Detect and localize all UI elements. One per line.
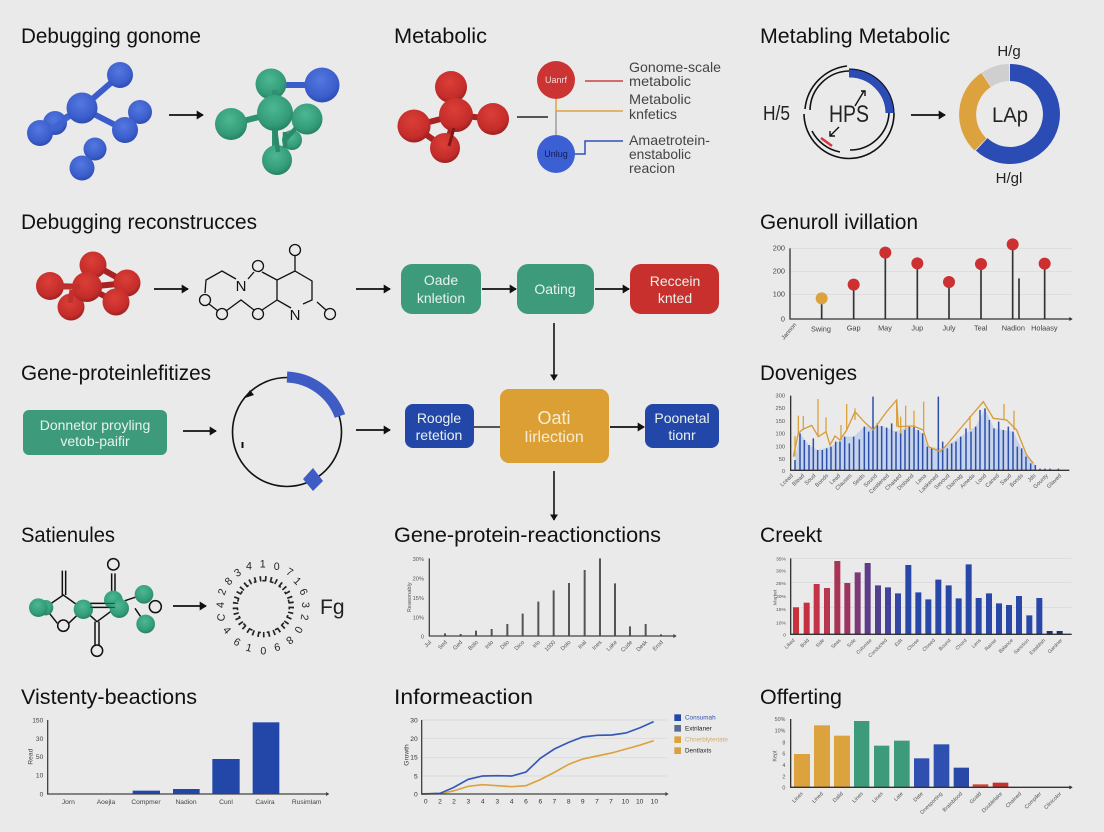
axis labels: Brainblood <box>942 791 964 813</box>
arrow <box>169 114 203 116</box>
node diagram <box>537 59 721 176</box>
axis labels: Ameda <box>959 473 977 490</box>
legend: Chnerblyteriate <box>685 737 728 744</box>
dial numerals: 8 <box>223 575 235 588</box>
label: HPS: HPS <box>829 101 869 128</box>
axis labels: 2 <box>438 798 442 805</box>
dial numerals: 0 <box>274 561 280 573</box>
axis labels: Laskened <box>918 473 940 495</box>
axis labels: Seas <box>830 637 843 650</box>
axis labels: 0 <box>414 791 418 798</box>
axis labels: Gap <box>847 324 861 333</box>
legend text: Metabolic <box>629 91 691 107</box>
axis labels: Soud <box>804 473 817 487</box>
axis labels: 100 <box>773 290 785 299</box>
axis labels: Growth <box>403 744 410 766</box>
axis labels: 5 <box>414 773 418 780</box>
axis labels: 15 <box>410 755 418 762</box>
axis labels: Clauses <box>835 473 854 492</box>
dial numerals: 0 <box>260 646 266 658</box>
dial numerals: 1 <box>291 575 303 588</box>
axis labels: 8 <box>782 740 785 746</box>
axis labels: Lines <box>791 791 805 804</box>
label: H/gl bottom: H/gl <box>996 170 1022 187</box>
box: Oade knletion: knletion <box>417 290 465 306</box>
axis labels: Bound <box>938 638 953 652</box>
axis labels: Dilo <box>500 640 511 651</box>
axis labels: Inal <box>577 640 588 651</box>
axis labels: May <box>878 324 892 333</box>
axis labels <box>407 557 665 654</box>
axis labels: Teal <box>974 324 988 333</box>
axis labels <box>773 244 1058 341</box>
arrow <box>482 288 516 290</box>
axis labels: Blead <box>792 473 806 488</box>
axis labels: 200 <box>773 267 785 276</box>
atom label: N left: N <box>236 278 246 295</box>
axis labels: 300 <box>776 394 785 400</box>
axis labels: Chaised <box>884 473 903 492</box>
axis labels: 7 <box>609 798 613 805</box>
legend text: Gonome-scale <box>629 59 721 75</box>
dial numerals: 6 <box>296 587 310 597</box>
axis labels: Bonds <box>1009 473 1025 489</box>
axis labels: 150 <box>32 717 44 724</box>
axis labels: Jup <box>911 324 923 333</box>
axis labels: Lena <box>915 473 929 486</box>
axis labels: Gounty <box>1033 473 1050 490</box>
title: Metabling Metabolic: Metabling Metabolic <box>760 25 950 48</box>
axis labels: Lined <box>811 791 825 805</box>
axis labels: 20% <box>776 594 787 600</box>
dial numerals: 4 <box>215 602 227 608</box>
title: Creekt: Creekt <box>760 524 822 547</box>
dial numerals: 2 <box>298 613 310 621</box>
node: red <box>537 61 575 99</box>
icon: numbered dial <box>215 558 311 658</box>
axis labels <box>403 717 658 805</box>
icon: red molecule 2 <box>36 252 140 320</box>
box: Oati Iirlection: Oati <box>537 408 571 428</box>
legend text: metabolic <box>629 73 691 89</box>
axis labels: Lake <box>606 640 619 653</box>
legend: Dentlaxts <box>685 748 711 755</box>
box: Reccein knted <box>630 264 719 314</box>
title: Vistenty-beactions: Vistenty-beactions <box>21 686 197 709</box>
label: H/5: H/5 <box>763 103 790 125</box>
axis labels: 50 <box>779 457 785 463</box>
axis labels: Swing <box>811 324 831 333</box>
icon: skeletal structure <box>200 244 336 324</box>
axis labels: 0 <box>783 633 786 639</box>
axis labels: Compmer <box>131 799 161 806</box>
axis labels: Ged <box>452 640 464 652</box>
axis labels: 10% <box>413 615 424 621</box>
axis labels: Cunl <box>219 799 233 806</box>
axis labels: Desk <box>636 640 649 653</box>
axis labels: Doublelake <box>981 791 1004 814</box>
axis labels: Establish <box>1029 638 1047 656</box>
connector line <box>517 116 548 118</box>
axis labels <box>773 556 1064 659</box>
axis labels: Compiler <box>1024 791 1043 810</box>
dial numerals: 1 <box>260 558 266 570</box>
axis labels: 10 <box>622 798 629 805</box>
axis labels: Sed <box>437 640 449 651</box>
arrow <box>610 426 644 428</box>
box: Oating <box>517 264 594 314</box>
axis labels: Read <box>28 748 35 765</box>
axis labels: Jannon <box>781 322 798 341</box>
axis labels: Lcead <box>780 473 795 488</box>
axis labels: 10% <box>775 728 786 734</box>
axis labels: Edit <box>894 637 905 648</box>
axis labels: Liked <box>784 638 797 651</box>
dial numerals: 3 <box>299 602 311 608</box>
axis labels: 30% <box>413 557 424 563</box>
axis labels: 100 <box>776 431 785 437</box>
axis labels: Lines <box>851 791 865 804</box>
spike chart: Gene-protein-reactionctions <box>407 557 677 654</box>
title: Metabolic: Metabolic <box>394 25 487 48</box>
axis labels: Lens <box>971 637 983 650</box>
axis labels: 10% <box>776 620 787 626</box>
label: LAp: LAp <box>992 104 1028 127</box>
title: Offerting: Offerting <box>760 686 842 709</box>
axis labels: Bolo <box>467 640 480 652</box>
legend: Extrilaner <box>685 725 712 732</box>
axis labels: Sole <box>846 638 858 649</box>
lollipop chart: Genuroll ivillation <box>773 238 1073 341</box>
axis labels: 6 <box>782 752 785 758</box>
bar and line chart: Doveniges <box>776 394 1069 495</box>
dial numerals: 6 <box>231 636 242 649</box>
axis labels: 250 <box>776 406 785 412</box>
icon: HPS ring diagram <box>804 66 894 159</box>
axis labels: 30 <box>410 717 418 724</box>
node: blue <box>537 135 575 173</box>
title: Debugging gonome: Debugging gonome <box>21 25 201 48</box>
axis labels: 6 <box>538 798 542 805</box>
legend <box>674 714 728 755</box>
axis labels: July <box>942 324 956 333</box>
axis labels: 150 <box>776 419 785 425</box>
box: Poonetal tionr <box>645 404 719 448</box>
node label: red: Uanrf <box>545 75 567 85</box>
axis labels: Holaasy <box>1031 324 1058 333</box>
axis labels: 15% <box>776 607 787 613</box>
box: Oade knletion <box>401 264 481 314</box>
axis labels: 200 <box>773 244 785 253</box>
axis labels: Chord <box>955 638 969 652</box>
axis labels: 0 <box>782 469 785 475</box>
box: Roogle retetion: retetion <box>416 427 462 443</box>
axis labels: 10 <box>636 798 644 805</box>
axis labels: Erod <box>652 640 665 653</box>
box: Roogle retetion <box>405 404 474 448</box>
atom label: N right: N <box>290 307 300 324</box>
axis labels: 7 <box>552 798 556 805</box>
axis labels <box>28 717 322 806</box>
axis labels: Dolo <box>560 640 572 652</box>
dial numerals: C <box>215 612 228 622</box>
axis labels: Bonds <box>814 473 830 489</box>
bar chart: Creekt <box>773 556 1072 659</box>
title: Debugging reconstrucces: Debugging reconstrucces <box>21 211 257 234</box>
bar chart: Offerting <box>773 717 1073 816</box>
axis labels: Aoejla <box>97 799 116 806</box>
arrow <box>595 288 629 290</box>
arrow <box>356 429 390 431</box>
box: Reccein knted: knted <box>658 290 692 306</box>
axis labels: Seids <box>852 473 867 487</box>
axis labels: Jul <box>424 640 433 649</box>
arrow <box>183 430 216 432</box>
axis labels: 2 <box>452 798 456 805</box>
dial numerals: 8 <box>283 633 295 646</box>
axis labels: Clinicolor <box>1043 791 1063 811</box>
axis labels: 15% <box>413 596 424 602</box>
legend text: reacion <box>629 160 675 176</box>
title: Satienules: Satienules <box>21 524 115 547</box>
axis labels: 3 <box>495 798 499 805</box>
axis labels: 20% <box>413 577 424 583</box>
axis labels: 30 <box>36 736 44 743</box>
box: Oati Iirlection <box>500 389 609 463</box>
title: Doveniges: Doveniges <box>760 362 857 385</box>
axis labels: Onesporting <box>919 791 944 816</box>
dial numerals: 4 <box>220 625 233 637</box>
axis labels: Dalid <box>832 791 845 804</box>
dial numerals: 7 <box>284 566 295 579</box>
axis labels: Cestlened <box>868 473 891 495</box>
icon: green molecule <box>215 68 340 175</box>
axis labels: Lines <box>871 791 885 804</box>
axis labels: Ines <box>592 640 604 652</box>
axis labels: 0 <box>40 791 44 798</box>
axis labels: 2 <box>782 775 785 781</box>
title: Genuroll ivillation: Genuroll ivillation <box>760 211 918 234</box>
axis labels: 50% <box>775 717 786 723</box>
box: Oating: Oating <box>534 281 576 297</box>
axis labels: 50 <box>36 754 44 761</box>
axis labels <box>773 717 1063 816</box>
box: Roogle retetion: Roogle <box>417 410 461 426</box>
legend text <box>629 59 721 176</box>
title: Gene-protein-reactionctions: Gene-protein-reactionctions <box>394 524 661 547</box>
axis labels: Conducted <box>867 638 889 659</box>
arrow <box>911 114 945 116</box>
axis labels: 10 <box>651 798 658 805</box>
arrow down <box>553 323 555 380</box>
connector line <box>474 426 500 428</box>
axis labels: Lond <box>975 473 988 486</box>
node label: blue: Unlug <box>544 149 568 159</box>
axis labels: 0 <box>782 786 785 792</box>
axis labels: Chained <box>1005 791 1023 809</box>
bar chart: Vistenty-beactions <box>28 717 329 806</box>
arrow down <box>553 471 555 520</box>
axis labels: Nadion <box>1002 324 1025 333</box>
axis labels: Jds <box>1027 473 1038 484</box>
axis labels: Lead <box>829 473 842 486</box>
dial numerals: 2 <box>216 587 229 597</box>
box: Poonetal tionr: Poonetal <box>654 410 710 426</box>
box: Oati Iirlection: Iirlection <box>524 429 584 446</box>
line chart: Informeaction <box>403 714 728 805</box>
axis labels: Rusimlam <box>292 799 322 806</box>
box: Donnetor proyling: vetob-paifir <box>60 433 130 449</box>
axis labels: 4 <box>782 763 785 769</box>
dial numerals: 3 <box>232 566 243 580</box>
axis labels: Dico <box>514 640 526 652</box>
axis labels: Disband <box>896 473 915 492</box>
axis labels: Bold <box>799 638 811 649</box>
axis labels: 30% <box>776 568 787 574</box>
axis labels: Irlo <box>532 640 542 650</box>
axis labels: 20 <box>410 736 418 743</box>
axis labels: 25% <box>776 581 787 587</box>
icon: red molecule <box>398 71 509 163</box>
icon: plasmid ring <box>232 377 342 491</box>
axis labels: Market <box>773 589 779 605</box>
axis labels: Sound <box>863 473 879 489</box>
arrow <box>356 288 390 290</box>
axis labels <box>776 394 1063 495</box>
axis labels: Cavira <box>255 799 275 806</box>
title: Informeaction: Informeaction <box>394 686 533 709</box>
axis labels: 7 <box>595 798 599 805</box>
dial numerals: 1 <box>244 642 253 655</box>
axis labels: Closed <box>922 638 937 653</box>
axis labels: 6 <box>524 798 528 805</box>
axis labels: 0 <box>421 635 424 641</box>
title: Gene-proteinlefitizes: Gene-proteinlefitizes <box>21 362 211 385</box>
axis labels: 1000 <box>544 640 557 653</box>
axis labels: Nadion <box>175 799 197 806</box>
axis labels: Inlo <box>484 640 495 651</box>
axis labels: Balance <box>998 638 1015 655</box>
legend: Consumah <box>685 715 716 722</box>
axis labels: Sevoud <box>934 473 951 491</box>
axis labels: Glaved <box>1046 473 1063 490</box>
axis labels: Caned <box>985 473 1001 489</box>
axis labels: Jorn <box>62 799 75 806</box>
axis labels: 4 <box>481 798 485 805</box>
axis labels: Reasonably <box>407 582 413 612</box>
box: Reccein knted: Reccein <box>650 273 700 289</box>
axis labels: Goald <box>969 791 983 805</box>
axis labels: 0 <box>424 798 428 805</box>
axis labels: Saud <box>999 473 1013 487</box>
axis labels: 100 <box>776 445 785 451</box>
axis labels: Cude <box>620 640 634 654</box>
legend text: Amaetrotein- <box>629 132 710 148</box>
arrow <box>173 605 206 607</box>
label: Fg: Fg <box>320 596 345 619</box>
axis labels: 9 <box>581 798 585 805</box>
molecule: green ring structure <box>29 559 161 656</box>
arrow <box>154 288 188 290</box>
label: H/g top: H/g <box>997 43 1021 60</box>
icon: blue molecule <box>27 62 152 180</box>
box: Donnetor proyling: Donnetor proyling <box>40 417 150 433</box>
box: Donnetor proyling <box>23 410 167 455</box>
box: Oade knletion: Oade <box>424 272 458 288</box>
dial numerals: 0 <box>291 624 305 635</box>
dial numerals: 9 <box>273 640 281 653</box>
axis labels: 35% <box>776 556 787 562</box>
axis labels: 8 <box>567 798 571 805</box>
dial numerals: 4 <box>246 560 252 572</box>
axis labels: Side <box>815 638 826 649</box>
donut chart <box>968 72 1051 155</box>
axis labels: 3 <box>466 798 470 805</box>
axis labels: Colonise <box>855 638 874 656</box>
axis labels: 4 <box>510 798 514 805</box>
axis labels: Gardner <box>1047 638 1064 655</box>
axis labels: Rainer <box>984 638 999 652</box>
box: Poonetal tionr: tionr <box>668 427 696 443</box>
axis labels: 0 <box>781 314 785 323</box>
axis labels: 10 <box>36 772 44 779</box>
legend text: knfetics <box>629 106 677 122</box>
axis labels: Date <box>913 791 925 803</box>
axis labels: Kept <box>773 750 779 761</box>
axis labels: Late <box>893 791 905 803</box>
axis labels: Diarnag <box>946 473 964 491</box>
axis labels: Chose <box>906 638 921 652</box>
dial numerals <box>215 558 311 658</box>
legend text: enstabolic <box>629 146 691 162</box>
axis labels: Sanction <box>1013 638 1031 656</box>
